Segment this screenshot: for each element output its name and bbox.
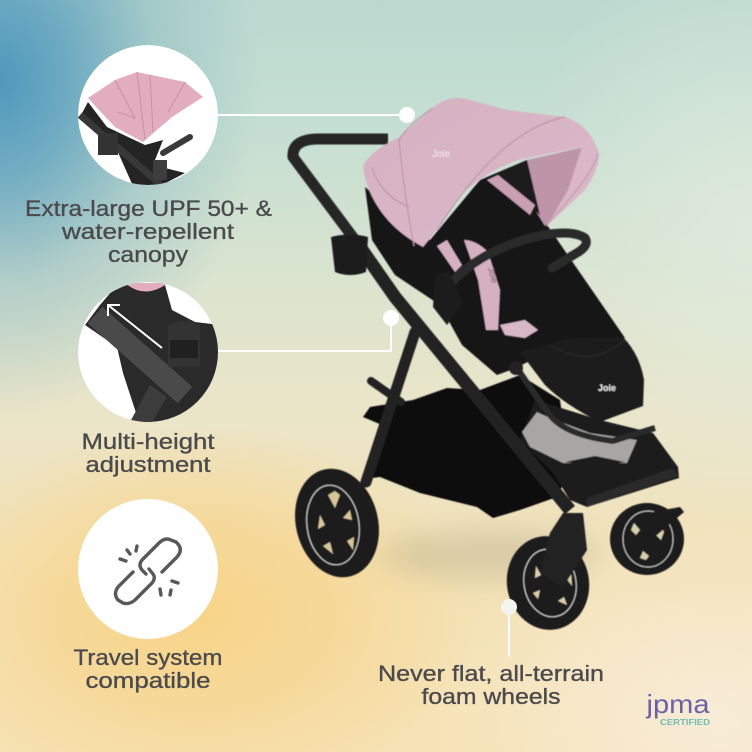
jpma certified logo: CERTIFIED [660,718,710,727]
basket mesh panel [522,412,637,463]
far-side rear wheel [610,503,684,575]
near-side rear wheel [284,460,390,586]
harness pads [437,240,538,338]
arrow [108,305,162,348]
label: travel system: compatible [86,668,210,693]
footrest tray [520,400,679,507]
label: travel system [74,645,222,693]
circle: link icon [78,499,218,639]
front wheel [499,513,597,636]
connector: wheels [501,599,517,657]
label: canopy: Extra-large UPF 50+ & [25,196,272,221]
label: wheels: Never flat, all-terrain [378,661,604,686]
label: canopy: water-repellent [61,219,234,244]
cup holder [331,234,368,275]
circle: canopy detail [78,45,218,186]
label: canopy [25,196,272,267]
canopy [363,98,599,247]
icon: broken chain link [116,539,180,604]
rear leg [366,332,415,482]
label: adjustment: adjustment [86,452,210,477]
harness pads: Joie [486,266,500,284]
bumper bar [452,233,586,282]
jpma certified logo: jpma [645,689,710,719]
footmuff logo: Joie [598,383,616,393]
footmuff [520,337,644,422]
circle: height adjustment detail [78,282,220,425]
canopy underside [527,147,597,226]
connector: adjustment [218,310,399,351]
handlebar and main frame [293,139,388,244]
floor shadow [380,531,600,579]
label: adjustment: Multi-height [82,429,214,454]
jpma certified logo [645,689,710,727]
stroller photo [284,98,684,636]
canopy logo: Joie [432,149,451,160]
label: wheels: foam wheels [422,684,560,709]
connector: canopy [218,107,415,123]
label: adjustment [82,429,214,477]
basket [363,375,570,518]
label: travel system: Travel system [74,645,222,670]
leg rest tube [515,365,655,441]
label: wheels [378,661,604,709]
hinge [433,271,463,325]
seat body [365,160,625,375]
label: canopy: canopy [108,242,188,267]
